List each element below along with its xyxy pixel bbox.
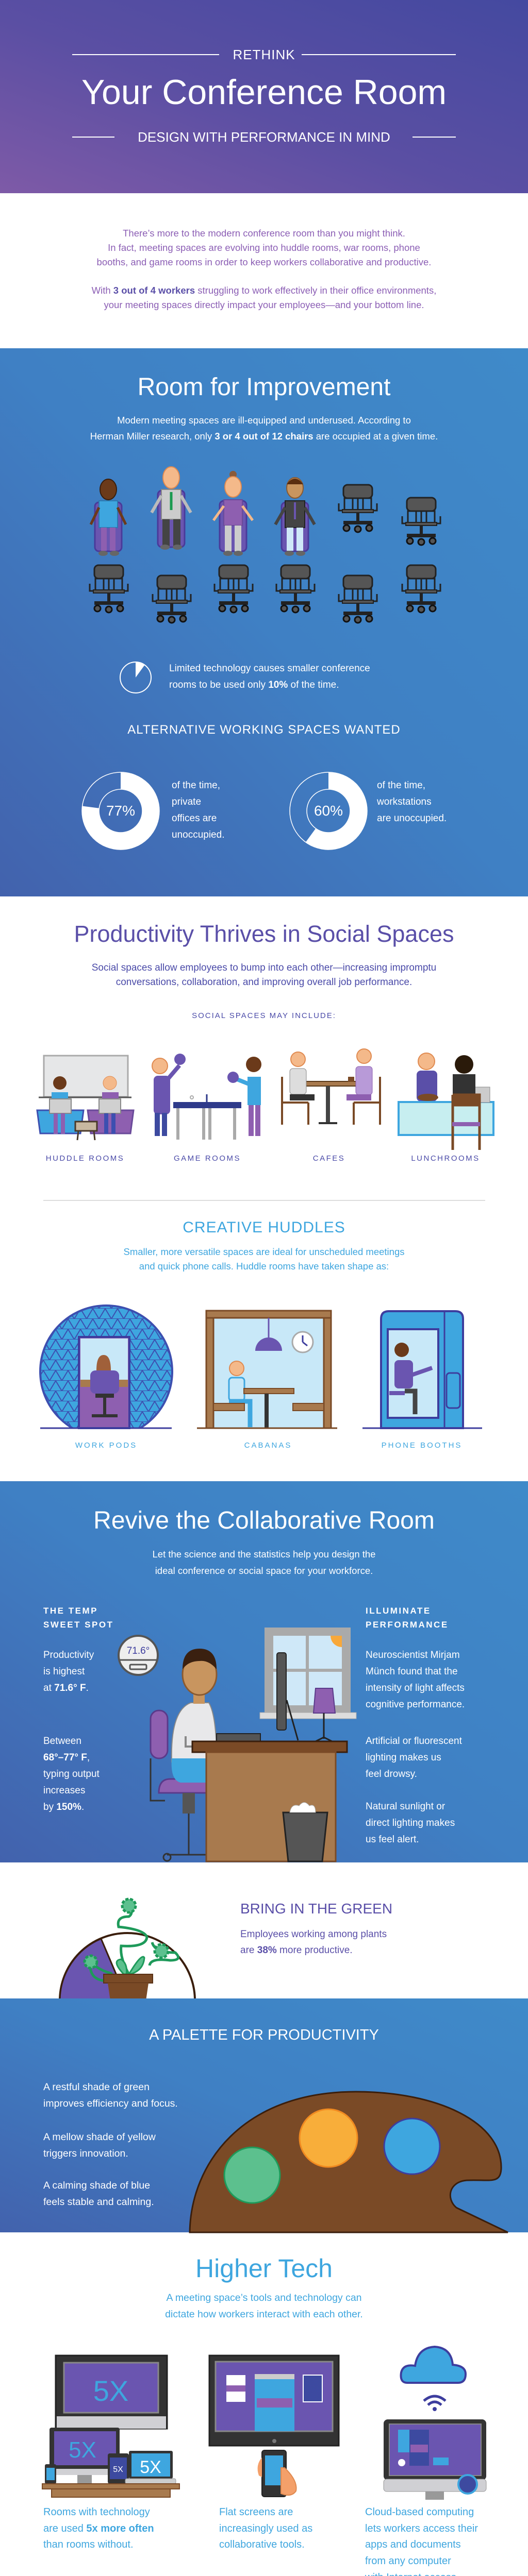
labels: social spaces [46,1154,480,1163]
text: social spaces intro: conversations, collaboration, and improving overall job performance. [116,977,412,988]
text: productivity temp [43,1650,94,1693]
text: palette colours: improves efficiency and focus. [43,2098,178,2109]
text: artificial light: lighting makes us [366,1752,441,1763]
text: creative huddles [123,1246,404,1272]
text: tech column 2: Flat screens are [219,2506,293,2518]
donut label 60%: 60% [314,803,343,819]
text: artificial light: Artificial or fluorescent [366,1736,462,1747]
illustration: potted plant dome [59,1898,196,1998]
labels: social spaces: CAFES [313,1154,345,1163]
illustration: paint palette [190,2092,508,2232]
text: higher tech intro: dictate how workers interact with each other. [165,2309,363,2320]
text: lighting: cognitive performance. [366,1699,465,1710]
text: natural light [366,1801,455,1845]
text: natural light: Natural sunlight or [366,1801,445,1812]
text: tech column 3 [365,2506,478,2576]
text: typing output [43,1736,100,1812]
blue section background: revive [0,1481,528,1862]
text: private offices: offices are [172,813,217,824]
text: limited technology: Limited technology causes smaller conference [169,663,370,674]
text: social spaces intro: Social spaces allow employees to bump into each other—increasing impromptu [92,962,436,973]
intro text: booths, and game rooms in order to keep workers collaborative and productive. [97,257,431,267]
text: tech column 1 [43,2506,154,2550]
text: lighting: intensity of light affects [366,1683,465,1693]
text: palette colours: A calming shade of blue [43,2180,150,2191]
donut chart 60% [290,772,367,850]
person 1 [91,479,126,556]
text: tech column 3: Cloud-based computing [365,2506,474,2518]
text: plants: are 38% more productive. [240,1945,353,1956]
text: tech column 1: Rooms with technology [43,2506,150,2518]
text: tech column 3: apps and documents [365,2539,461,2550]
header background [0,0,528,193]
text: productivity temp: is highest [43,1666,85,1677]
heading: temp sweet spot: SWEET SPOT [43,1620,113,1630]
heading: temp sweet spot [43,1606,113,1630]
text: chairs occupied [90,415,438,442]
illustration: devices 5X: 5X [113,2465,123,2474]
text: tech column 2: collaborative tools. [219,2539,305,2550]
illustration: cloud computing [384,2347,486,2500]
illustration: devices 5X: 5X [93,2375,128,2407]
illustration: flat screen and phone [209,2355,339,2497]
text: artificial light: feel drowsy. [366,1769,417,1780]
labels: huddle types: CABANAS [244,1441,292,1450]
text: revive intro: ideal conference or social space for your workforce. [155,1565,373,1576]
illustration: work pod [40,1306,172,1437]
text: social spaces intro [92,962,436,988]
text: tech column 2 [219,2506,312,2550]
heading: Room for Improvement: Room for Improvement [138,374,390,401]
text: plants [240,1929,387,1956]
donut chart 77% [82,772,159,850]
heading: illuminate performance [366,1606,449,1630]
subheading: may include: SOCIAL SPACES MAY INCLUDE: [192,1011,336,1020]
text: private offices: unoccupied. [172,829,224,840]
illustration: phone booth [362,1311,482,1428]
heading: illuminate performance: PERFORMANCE [366,1620,449,1630]
heading: Revive: Revive the Collaborative Room [93,1507,435,1534]
heading: creative huddles: CREATIVE HUDDLES [183,1219,345,1236]
illustration: devices 5X: 5X [69,2437,96,2463]
intro text: your meeting spaces directly impact your employees—and your bottom line. [104,299,424,310]
text: private offices [172,780,224,840]
illustration: game room [152,1054,261,1140]
text: private offices: of the time, [172,780,220,791]
text: tech column 2: increasingly used as [219,2523,312,2534]
text: private offices: private [172,796,201,807]
illustration: office worker at desk [151,1624,356,1861]
text: palette colours: A restful shade of green [43,2081,150,2093]
labels: huddle types: WORK PODS [75,1441,137,1450]
text: chairs occupied: Modern meeting spaces are ill-equipped and underused. According to [117,415,411,426]
text: productivity temp: at 71.6° F. [43,1683,89,1693]
illustration: devices 5X: 5X [140,2458,161,2477]
heading: Productivity Thrives: Productivity Thrives in Social Spaces [74,921,454,947]
text: typing output: typing output [43,1769,100,1780]
text: tech column 3: from any computer [365,2555,451,2567]
text: revive intro [153,1549,375,1576]
labels: huddle types: PHONE BOOTHS [382,1441,462,1450]
intro text: There’s more to the modern conference room than you might think. [123,228,405,239]
empty chairs [90,485,440,623]
illustration: cabana [197,1311,337,1428]
text: lighting: Münch found that the [366,1666,458,1677]
text: productivity temp: Productivity [43,1650,94,1660]
text: limited technology: rooms to be used only 10% of the time. [169,680,339,690]
text: palette colours: feels stable and calming. [43,2196,154,2208]
person 4 [275,478,315,556]
blue section background: room for improvement [0,348,528,896]
text: palette colours [43,2081,178,2208]
text: typing output: increases [43,1785,85,1796]
text: revive intro: Let the science and the statistics help you design the [153,1549,375,1560]
heading: palette: A PALETTE FOR PRODUCTIVITY [149,2027,379,2043]
text: chairs occupied: Herman Miller research, only 3 or 4 out of 12 chairs are occupied at a given time. [90,431,438,442]
text: tech column 1: are used 5x more often [43,2523,154,2534]
text: artificial light [366,1736,462,1780]
illustration: devices 5X [42,2355,179,2497]
header: subtitle: DESIGN WITH PERFORMANCE IN MIND [138,129,390,145]
header rule lines [72,55,456,137]
text: palette colours: A mellow shade of yellow [43,2131,156,2143]
text: lighting [366,1650,465,1710]
text: typing output: by 150%. [43,1802,84,1812]
divider [43,1200,485,1201]
text: tech column 1: than rooms without. [43,2539,134,2550]
text: workstations [377,780,447,824]
text: higher tech intro [165,2292,363,2320]
text: workstations: workstations [377,796,432,807]
text: workstations: of the time, [377,780,425,791]
heading: illuminate performance: ILLUMINATE [366,1606,431,1616]
blue section background: palette [0,1998,528,2232]
illustration: lunchroom [399,1053,493,1150]
labels: social spaces: GAME ROOMS [174,1154,241,1163]
illustration: temp thermostat: 71.6° [127,1646,150,1656]
labels: social spaces: LUNCHROOMS [411,1154,480,1163]
heading: bring in the green: BRING IN THE GREEN [240,1901,392,1917]
illustration: cafe [282,1049,380,1125]
text: palette colours: triggers innovation. [43,2148,128,2159]
occupied chairs: people [91,467,315,556]
labels: huddle types [75,1441,462,1450]
heading: higher tech: Higher Tech [195,2254,333,2283]
icon: 10% pie clock [120,662,151,693]
illustration: huddle room [37,1056,134,1140]
text: creative huddles: Smaller, more versatile spaces are ideal for unscheduled meetings [123,1246,404,1257]
text: limited technology [169,663,370,690]
heading: temp sweet spot: THE TEMP [43,1606,98,1616]
intro text: With 3 out of 4 workers struggling to work effectively in their office environments, [92,285,436,296]
header: RETHINK: RETHINK [233,47,295,62]
text: workstations: are unoccupied. [377,813,447,824]
labels: social spaces: HUDDLE ROOMS [46,1154,124,1163]
text: typing output: Between [43,1736,81,1747]
heading: alternative working spaces: ALTERNATIVE WORKING SPACES WANTED [127,723,401,737]
donut label 77%: 77% [106,803,135,819]
text: higher tech intro: A meeting space’s tools and technology can [166,2292,362,2303]
illustration: temp thermostat [119,1636,158,1675]
text: tech column 3: lets workers access their [365,2523,478,2534]
text: creative huddles: and quick phone calls. Huddle rooms have taken shape as: [139,1261,389,1272]
text: natural light: us feel alert. [366,1834,419,1845]
text: plants: Employees working among plants [240,1929,387,1940]
text: typing output: 68°–77° F, [43,1752,90,1763]
person 3 [213,471,253,556]
text: lighting: Neuroscientist Mirjam [366,1650,460,1660]
intro text: In fact, meeting spaces are evolving into huddle rooms, war rooms, phone [108,242,420,253]
text: natural light: direct lighting makes [366,1818,455,1828]
intro text [92,228,436,310]
person 2 [152,467,191,550]
header: main title: Your Conference Room [81,73,447,112]
